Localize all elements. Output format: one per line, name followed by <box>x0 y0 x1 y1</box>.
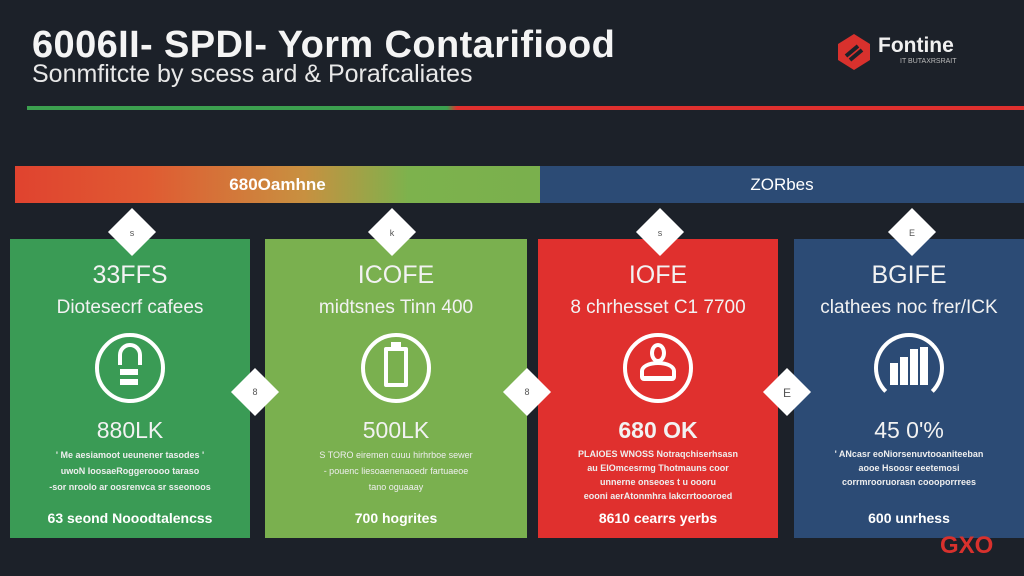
panel: green: 63 seond Nooodtalencss <box>48 510 212 526</box>
panel: light green: 500LK <box>363 417 429 443</box>
icon: bar chart <box>874 333 944 403</box>
icon: lock <box>95 333 165 403</box>
panel: red: 680 OK <box>618 417 698 443</box>
text: 8 <box>252 387 258 397</box>
banner left: 680Oamhne <box>229 175 326 194</box>
icon: person <box>623 333 693 403</box>
panel: light green: 700 hogrites <box>355 510 437 526</box>
text: E <box>909 228 915 238</box>
panel: blue <box>794 239 1024 538</box>
panel: red: au EIOmcesrmg Thotmauns coor <box>587 463 729 473</box>
panel: light green: ICOFE <box>358 261 434 289</box>
panel: green: 33FFS <box>92 261 168 289</box>
banner left <box>15 166 540 203</box>
banner right <box>540 166 1024 203</box>
divider lines <box>27 106 1024 110</box>
banner right: ZORbes <box>750 175 814 194</box>
panel: green: 880LK <box>97 417 163 443</box>
panel: blue: 600 unrhess <box>868 510 950 526</box>
panel: light green: midtsnes Tinn 400 <box>319 297 473 318</box>
panel: light green: tano oguaaay <box>369 482 423 492</box>
subtitle: Sonmfitcte by scess ard & Porafcaliates <box>32 60 472 88</box>
panel: green <box>10 239 250 538</box>
icon: battery <box>361 333 431 403</box>
panel: light green <box>265 239 527 538</box>
panel: blue: corrmrooruorasn coooporrrees <box>842 477 976 487</box>
panel: green: ' Me aesiamoot ueunener tasodes ' <box>56 450 204 460</box>
watermark logo: GXO <box>940 532 993 559</box>
panel: light green: S TORO eiremen cuuu hirhrboe sewer <box>319 450 473 460</box>
panel: red: PLAIOES WNOSS Notraqchiserhsasn <box>578 449 738 459</box>
panel: blue: 45 0'% <box>874 417 944 443</box>
logo: Fontine <box>878 34 954 57</box>
panel: blue: BGIFE <box>871 261 946 289</box>
text: s <box>658 228 662 238</box>
logo: IT BUTAXRSRAIT <box>900 58 957 65</box>
text: E <box>783 386 791 400</box>
text: 8 <box>524 387 530 397</box>
text: k <box>390 228 394 238</box>
panel: red <box>538 239 778 538</box>
logo <box>838 34 957 70</box>
panel: light green: - pouenc liesoaenenaoedr fartuaeoe <box>324 466 468 476</box>
panel: red: eooni aerAtonmhra lakcrrtoooroed <box>584 491 732 501</box>
diamonds side <box>231 368 279 416</box>
panel: blue: ' ANcasr eoNiorsenuvtooaniteeban <box>835 449 983 459</box>
panel: red: IOFE <box>629 261 687 289</box>
panel: red: unnerne onseoes t u oooru <box>600 477 716 487</box>
panel: red: 8610 cearrs yerbs <box>599 510 717 526</box>
diamonds top <box>108 208 156 256</box>
title: 6006II- SPDI- Yorm Contarifiood <box>32 24 615 66</box>
panel: blue: aooe Hsoosr eeetemosi <box>858 463 960 473</box>
panel: green: uwoN IoosaeRoggeroooo taraso <box>61 466 199 476</box>
diamond labels: s <box>130 228 134 238</box>
panel: red: 8 chrhesset C1 7700 <box>570 297 746 318</box>
panel: green: Diotesecrf cafees <box>57 297 203 318</box>
panel: green: -sor nroolo ar oosrenvca sr sseonoos <box>49 482 211 492</box>
panel: blue: clathees noc frer/ICK <box>820 297 998 318</box>
